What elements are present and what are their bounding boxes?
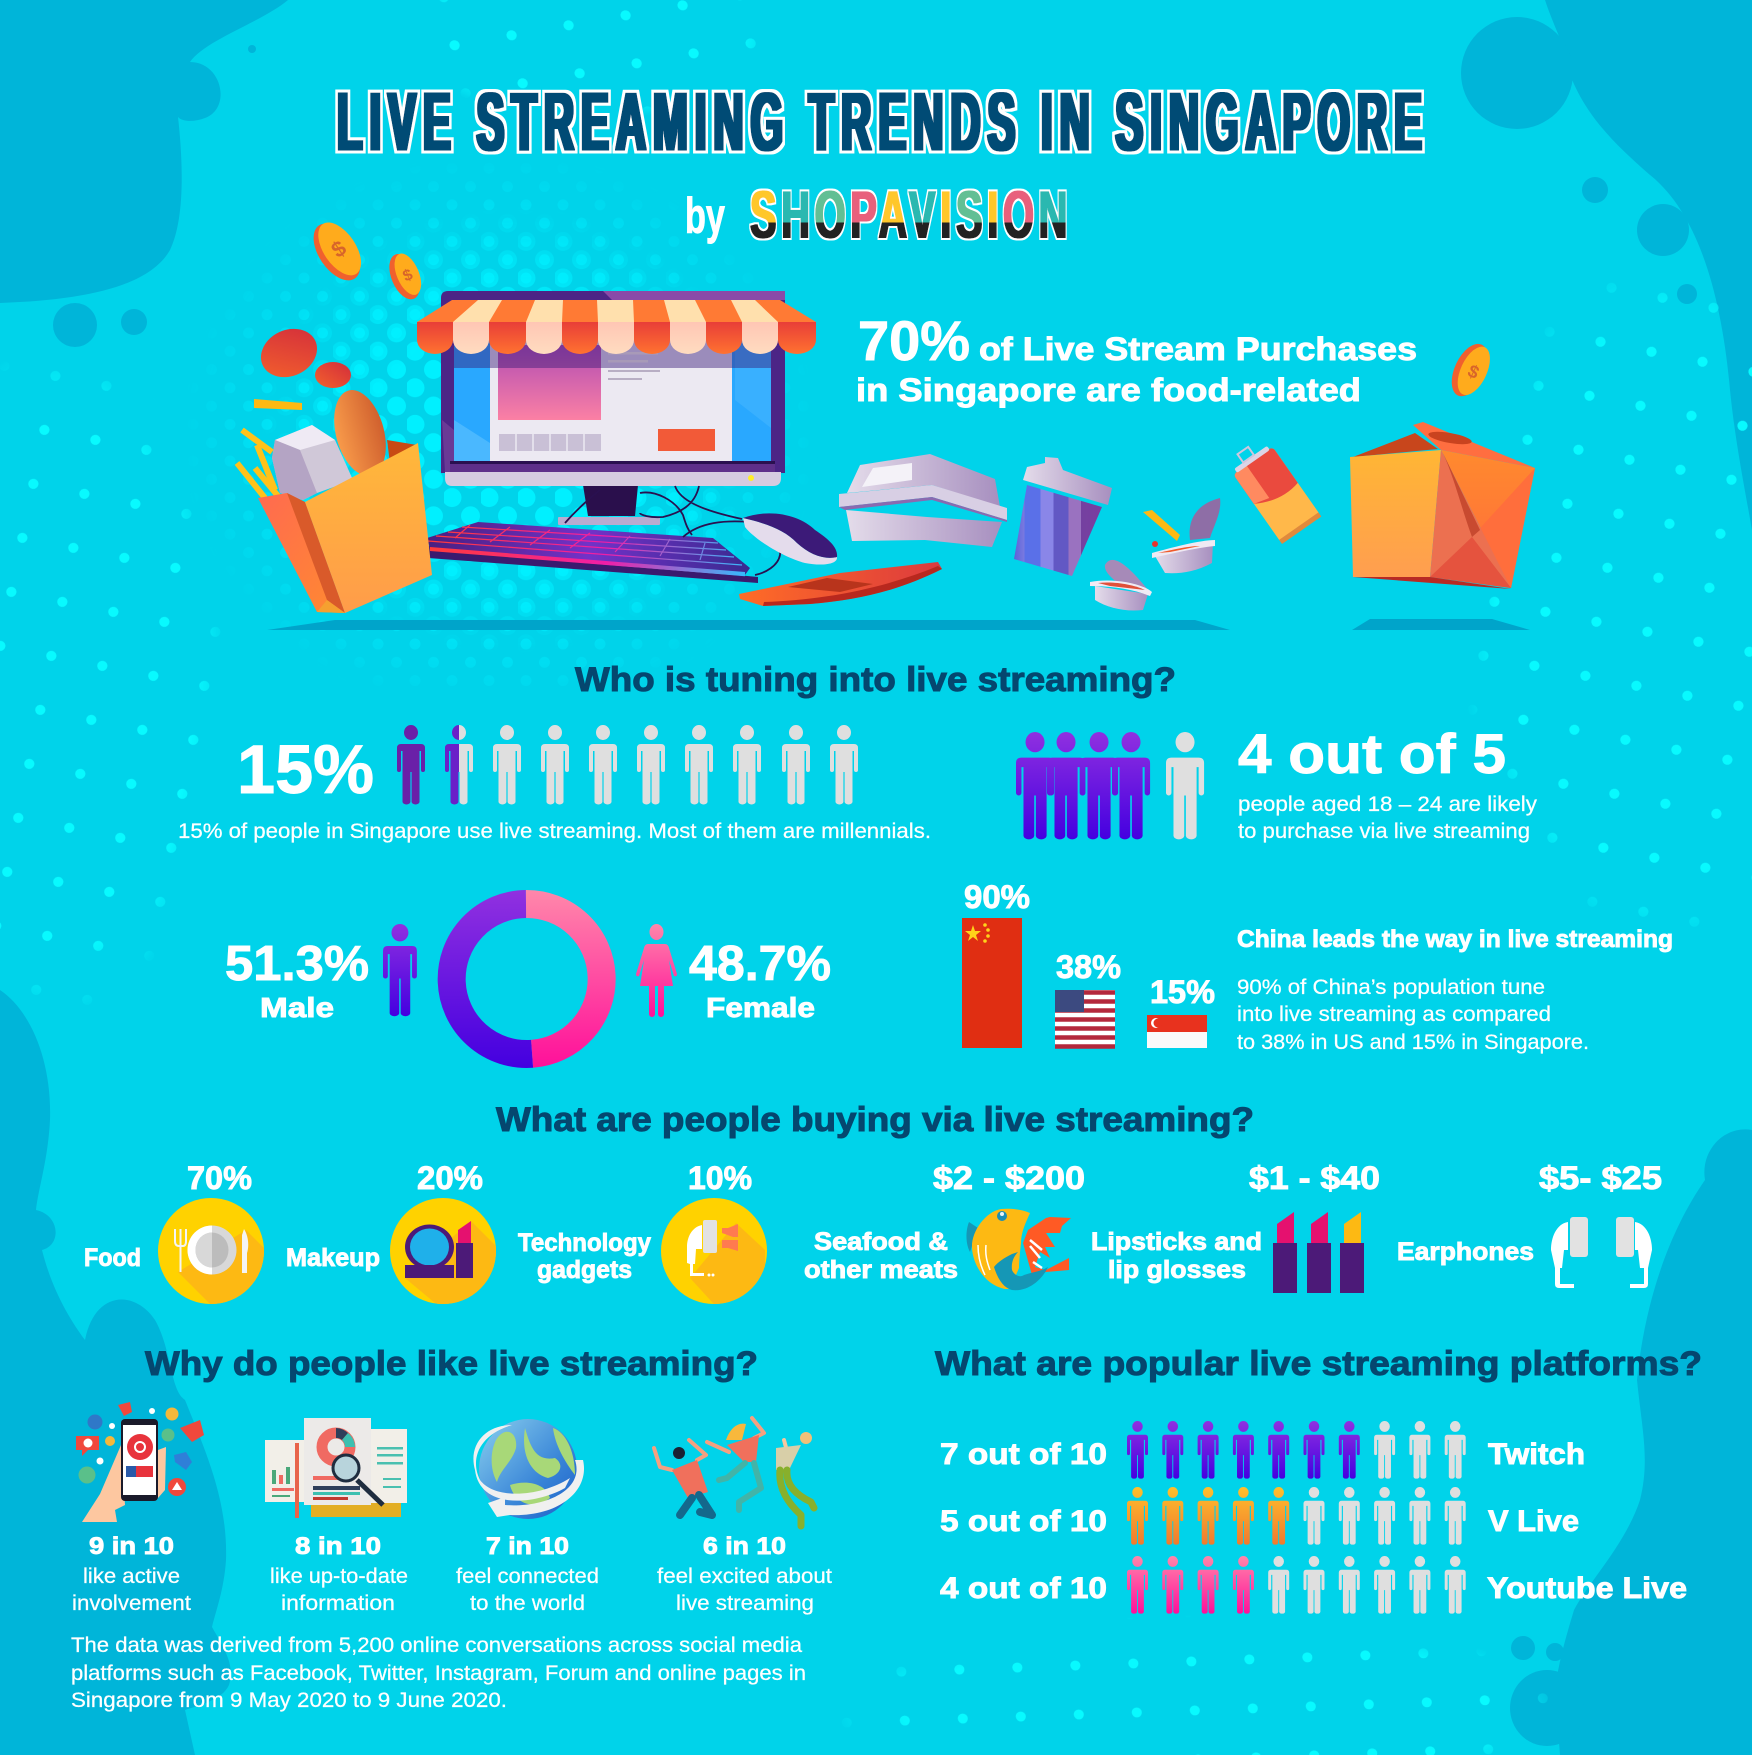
hero statement: of Live Stream Purchases (979, 331, 1417, 367)
icon: male (383, 924, 417, 1016)
category: makeup: Makeup (286, 1244, 380, 1272)
reason: connected to the world: 7 in 10 (486, 1533, 569, 1560)
gender split: 48.7% (689, 937, 831, 991)
bar: united states: 38% (1056, 949, 1121, 985)
icon: cables (565, 486, 780, 575)
platform: v live: 5 out of 10 (940, 1505, 1107, 1538)
category: lipsticks (1091, 1160, 1380, 1293)
people row (1016, 732, 1204, 839)
bar: china: 90% (964, 879, 1030, 915)
icon: tomatoes and fries (253, 320, 351, 410)
category: technology gadgets: gadgets (537, 1256, 632, 1284)
stat: 4 out of 5: 4 out of 5 (1238, 722, 1506, 785)
icon: jumping people (654, 1418, 814, 1526)
stat: 15% pictogram: 15% of people in Singapore use live streaming. Most of them are millennials. (178, 820, 931, 843)
footnote: Singapore from 9 May 2020 to 9 June 2020. (71, 1689, 507, 1712)
footnote: The data was derived from 5,200 online conversations across social media (71, 1634, 802, 1657)
icon: coins: $ (401, 266, 415, 285)
icon: coins: $ (327, 235, 351, 263)
reason: active involvement: involvement (72, 1592, 191, 1615)
bar: singapore: 15% (1150, 974, 1215, 1010)
icon: coins: $ (1465, 361, 1482, 383)
icon: food box (839, 454, 1007, 547)
category: makeup (287, 1166, 496, 1304)
pictogram row (1127, 1487, 1466, 1545)
category: seafood: Seafood & (814, 1228, 948, 1256)
bar: singapore (1147, 974, 1215, 1048)
category: technology gadgets: 10% (688, 1160, 752, 1196)
icon: lipsticks (1273, 1212, 1364, 1293)
footnote: platforms such as Facebook, Twitter, Instagram, Forum and online pages in (71, 1662, 806, 1685)
category: technology gadgets (518, 1166, 767, 1304)
hero statement (856, 309, 1417, 408)
reason: up-to-date information: like up-to-date (270, 1565, 408, 1588)
reason: excited about live streaming: 6 in 10 (703, 1533, 786, 1560)
bar: china (962, 879, 1030, 1048)
bar: united states (1055, 949, 1121, 1048)
category: technology gadgets: Technology (518, 1229, 651, 1257)
icon: drink cup (1014, 457, 1112, 576)
reason: up-to-date information: information (281, 1592, 395, 1615)
category: food: 70% (187, 1160, 252, 1196)
hero illustration: online food shop (237, 214, 1535, 630)
category: earphones: $5- $25 (1539, 1160, 1662, 1196)
gender split: Male (260, 992, 334, 1023)
byline: by Shopavision: SHOPAVISION (750, 177, 1072, 253)
people row 1 of 10 (397, 725, 858, 805)
icon: soda can (1225, 435, 1321, 544)
reason: connected to the world: to the world (470, 1592, 585, 1615)
category: earphones (1397, 1160, 1662, 1288)
category: lipsticks: Lipsticks and (1091, 1228, 1262, 1256)
stat: 15% pictogram (178, 725, 931, 843)
platform: youtube live: 4 out of 10 (940, 1572, 1107, 1605)
ground shadow (267, 619, 1530, 630)
icon: noodle box (1350, 422, 1535, 589)
icon: mirror and lipstick (390, 1198, 496, 1304)
platform: youtube live: Youtube Live (1487, 1572, 1687, 1605)
category: seafood: other meats (804, 1256, 958, 1284)
china text block: to 38% in US and 15% in Singapore. (1237, 1031, 1589, 1054)
platform: youtube live (940, 1556, 1687, 1614)
reason: active involvement: 9 in 10 (89, 1533, 174, 1560)
reason: excited about live streaming: feel excited about (657, 1565, 832, 1588)
heading: why do people like: Why do people like live streaming? (145, 1345, 758, 1383)
heading: who is tuning in: Who is tuning into live streaming? (575, 661, 1176, 699)
stat: 4 out of 5: people aged 18 – 24 are likely (1238, 793, 1538, 816)
icon: coins (304, 214, 1497, 403)
hero statement: 70% (858, 309, 970, 372)
platform: v live: V Live (1488, 1505, 1579, 1538)
icon: earphones (1551, 1217, 1652, 1288)
category: lipsticks: lip glosses (1108, 1256, 1246, 1284)
category: food: Food (84, 1244, 141, 1272)
icon: monitor with shop awning (417, 291, 816, 525)
category: seafood: $2 - $200 (933, 1160, 1085, 1196)
icon: mouse (743, 513, 837, 565)
donut chart (452, 904, 602, 1054)
category: makeup: 20% (417, 1160, 483, 1196)
flag bars (962, 879, 1215, 1048)
icon: sauce cups (1090, 498, 1220, 611)
byline: by Shopavision: by (685, 188, 725, 244)
pictogram row (1127, 1421, 1466, 1479)
pictogram row (1127, 1556, 1466, 1614)
icon: hand with phone and social bubbles (76, 1402, 204, 1522)
reason: active involvement: like active (83, 1565, 180, 1588)
stat: 4 out of 5 (1016, 722, 1538, 843)
gender split: 51.3% (225, 937, 369, 991)
china text block: into live streaming as compared (1237, 1003, 1551, 1026)
heading: what are people buying: What are people buying via live streaming? (496, 1101, 1254, 1139)
gender split (225, 904, 831, 1054)
reason: connected to the world (456, 1419, 599, 1615)
stat: 4 out of 5: to purchase via live streaming (1238, 820, 1530, 843)
category: seafood (804, 1160, 1085, 1290)
stat: 15% pictogram: 15% (237, 731, 374, 808)
reason: active involvement (72, 1402, 204, 1615)
heading: popular platforms: What are popular live streaming platforms? (935, 1345, 1702, 1383)
hero statement: in Singapore are food-related (856, 372, 1361, 408)
icon: plate and cutlery (158, 1198, 264, 1304)
icon: shopping bag (237, 384, 432, 613)
reason: excited about live streaming (654, 1418, 832, 1615)
platform: v live (940, 1487, 1579, 1545)
category: lipsticks: $1 - $40 (1249, 1160, 1380, 1196)
reason: connected to the world: feel connected (456, 1565, 599, 1588)
category: food (85, 1166, 264, 1304)
icon: earbud in circle (661, 1198, 767, 1304)
platform: twitch: 7 out of 10 (940, 1438, 1107, 1471)
category: earphones: Earphones (1397, 1238, 1534, 1266)
icon: globe with arrow (473, 1419, 584, 1519)
china text block (1237, 926, 1673, 1054)
china text block: China leads the way in live streaming (1237, 926, 1673, 953)
platform: twitch: Twitch (1488, 1438, 1585, 1471)
icon: red tray (739, 562, 942, 606)
reason: up-to-date information: 8 in 10 (295, 1533, 381, 1560)
icon: female (636, 924, 677, 1017)
footnote (71, 1634, 806, 1712)
icon: fish and shrimp (966, 1209, 1071, 1290)
icon: reports and magnifier (265, 1418, 407, 1518)
platform: twitch (940, 1421, 1585, 1479)
reason: excited about live streaming: live streaming (676, 1592, 814, 1615)
gender split: Female (706, 992, 815, 1023)
reason: up-to-date information (265, 1418, 408, 1615)
china text block: 90% of China’s population tune (1237, 976, 1545, 999)
icon: keyboard (413, 522, 758, 583)
